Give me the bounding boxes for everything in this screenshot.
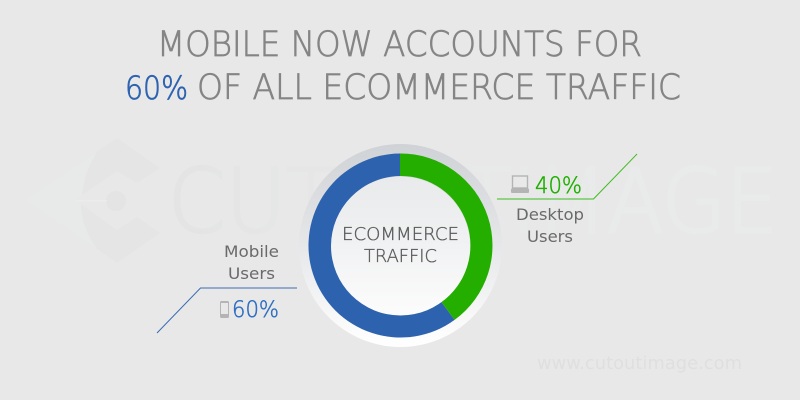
mobile callout xyxy=(157,242,297,333)
title: OF ALL ECOMMERCE TRAFFIC xyxy=(197,68,681,108)
center label: ECOMMERCE xyxy=(342,224,459,245)
desktop callout: Users xyxy=(527,227,573,246)
donut segment: desktop 40% xyxy=(400,153,492,320)
watermark logo xyxy=(26,138,160,263)
inner disc xyxy=(331,176,470,316)
mobile callout: Mobile xyxy=(224,242,279,261)
donut chart xyxy=(299,144,502,347)
mobile callout: 60% xyxy=(232,298,279,323)
mobile callout: Users xyxy=(228,264,275,283)
donut segment: mobile 60% xyxy=(308,154,455,337)
title xyxy=(125,25,681,108)
desktop callout xyxy=(497,154,637,246)
desktop callout: 40% xyxy=(535,174,582,199)
desktop callout: Desktop xyxy=(516,205,584,224)
watermark url: www.cutoutimage.com xyxy=(537,353,742,374)
center label: TRAFFIC xyxy=(364,246,437,267)
icon: phone xyxy=(220,301,229,318)
center label xyxy=(342,224,459,267)
title: MOBILE NOW ACCOUNTS FOR xyxy=(157,25,642,65)
icon: laptop xyxy=(511,176,529,193)
title: 60% xyxy=(125,69,188,107)
watermark wordmark: CUTOUTIMAGE xyxy=(168,150,778,253)
